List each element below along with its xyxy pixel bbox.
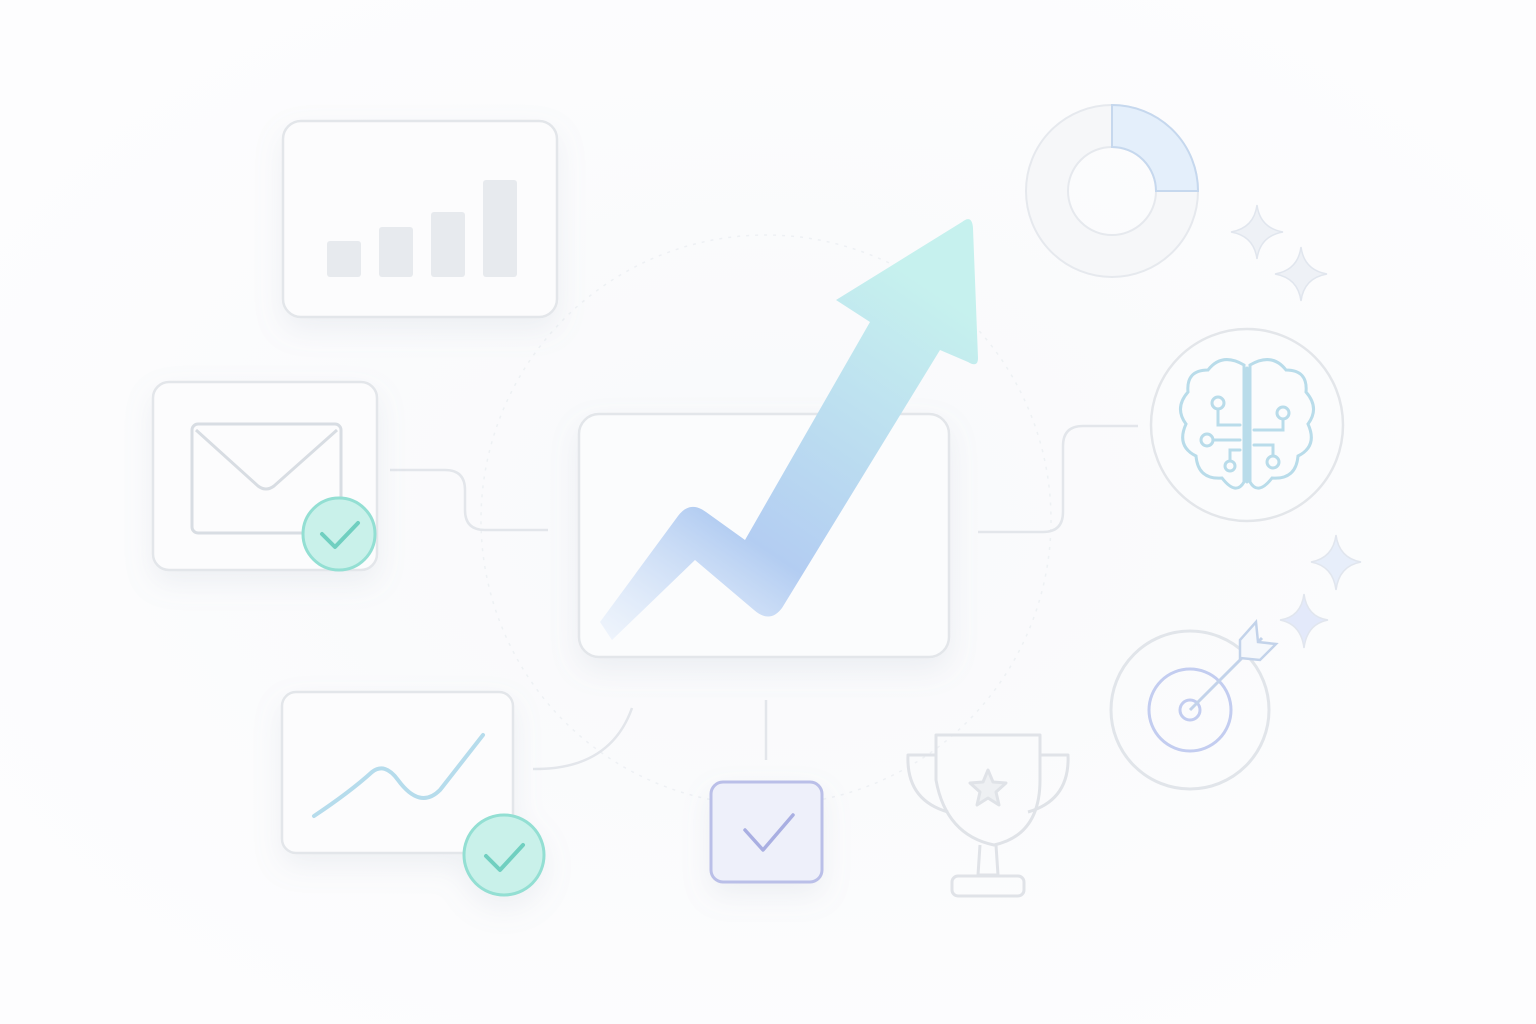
arrow: growth <box>600 219 978 640</box>
panel: bar chart card <box>283 121 557 317</box>
icon: target <box>1111 622 1276 789</box>
panel: central card <box>579 414 949 657</box>
panel: donut chart <box>1026 105 1198 277</box>
icon: brain <box>1151 329 1343 521</box>
panel: line chart card <box>282 692 544 895</box>
connectors <box>390 426 1138 769</box>
panel: checkbox <box>711 782 822 882</box>
panel: mail card <box>153 382 377 570</box>
icon: trophy <box>908 735 1068 896</box>
icon: sparkles <box>1231 205 1361 648</box>
